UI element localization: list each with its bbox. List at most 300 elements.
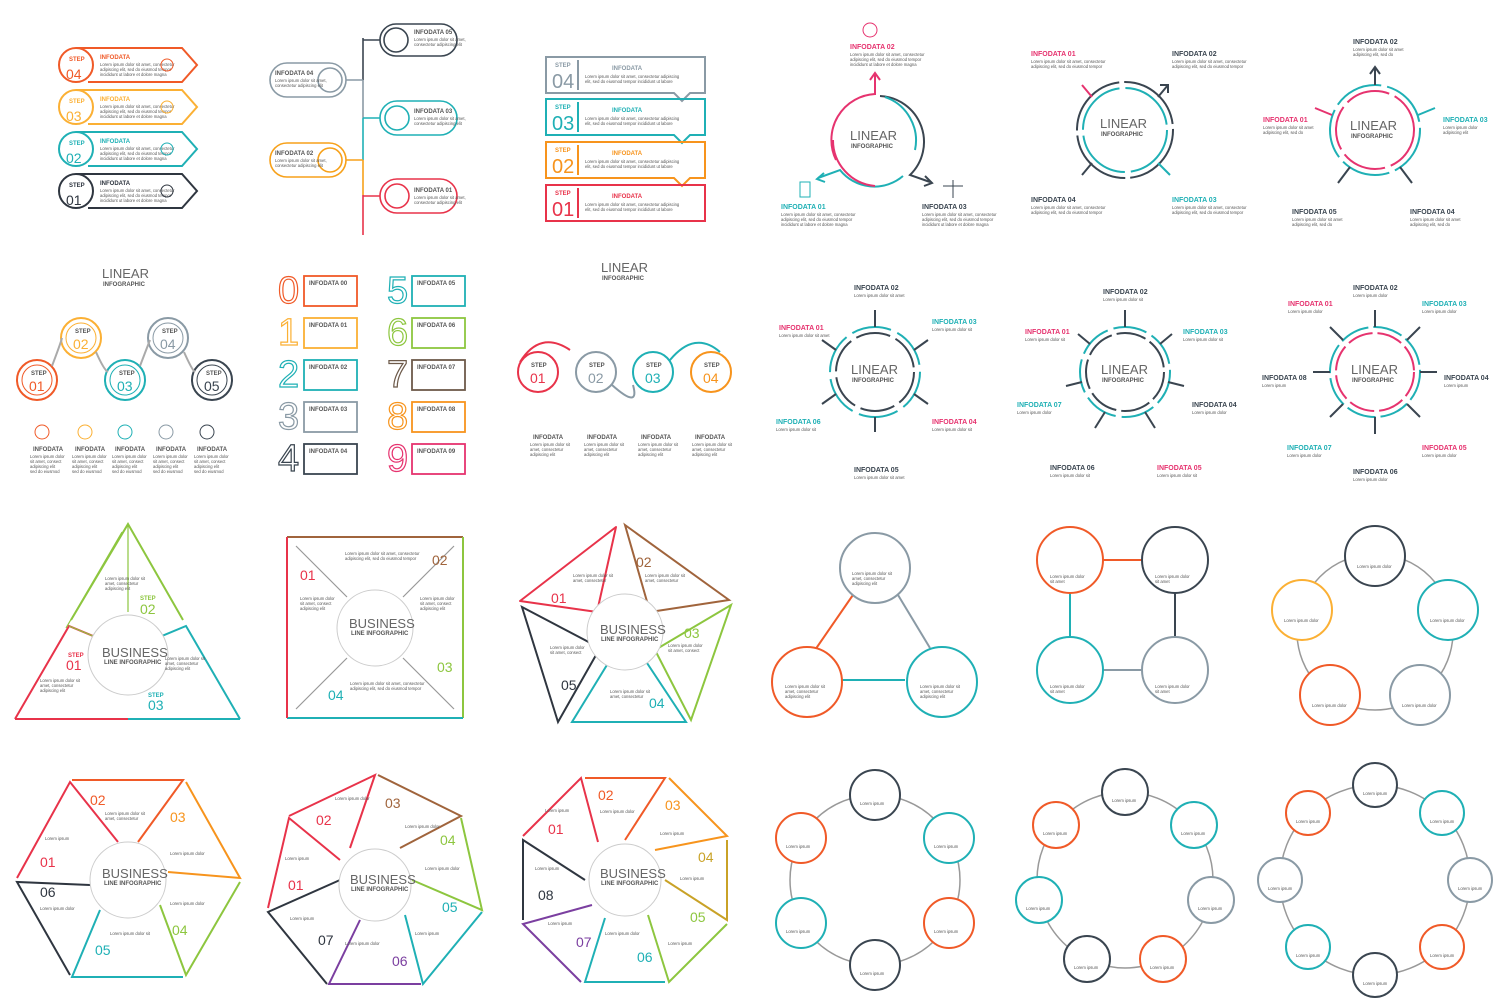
panel: 8 circle cycle: Lorem ipsum (1296, 953, 1321, 958)
labels: adipiscing elit, sed do (1263, 130, 1304, 135)
panel: numbers 0-9: 5 (387, 270, 408, 312)
label infodata 03: adipiscing elit, sed do eiusmod tempor (922, 217, 994, 222)
panel: 8 circle cycle: Lorem ipsum (1268, 886, 1293, 891)
panel: circle 6 arrows: LINEAR (851, 362, 898, 377)
labels: INFODATA 04 (1031, 197, 1076, 204)
panel: 4 step circles (518, 260, 733, 457)
panel: numbers 0-9: 3 (278, 396, 299, 438)
circles: 03 (117, 378, 133, 394)
labels: Lorem ipsum dolor sit amet (1263, 125, 1314, 130)
panel: square: adipiscing elit, sed do eiusmod tempor (345, 556, 417, 561)
infodata 05 (363, 24, 466, 56)
step 02: incididunt ut labore et dolore magna (100, 156, 167, 161)
panel: 4 step circles: adipiscing elit (638, 452, 664, 457)
panel: circular 3 arrows: LINEAR (850, 128, 897, 143)
panel: heptagon: Lorem ipsum (415, 931, 440, 936)
panel: triangle: 03 (148, 697, 164, 713)
panel: pentagon: Lorem ipsum dolor sit (645, 573, 686, 578)
info columns: sit amet, consect (30, 459, 62, 464)
panel: circle 6 arrows: Lorem ipsum dolor sit amet (779, 333, 830, 338)
panel: 8 circle cycle: Lorem ipsum (1430, 953, 1455, 958)
panel: circle 7 arrows: Lorem ipsum dolor (1017, 410, 1052, 415)
panel: pentagon: sit amet, consect (668, 648, 700, 653)
panel: 4 step circles: Lorem ipsum dolor sit (638, 442, 679, 447)
step 03: 03 (66, 108, 82, 124)
panel: circle 7 arrows: Lorem ipsum dolor sit (1025, 337, 1066, 342)
panel: circle 7 arrows: Lorem ipsum dolor sit (1157, 473, 1198, 478)
panel: 7 circle cycle: Lorem ipsum (1043, 831, 1068, 836)
panel: 7 circle cycle: Lorem ipsum (1112, 798, 1137, 803)
panel: 3 circle cycle: Lorem ipsum dolor sit (852, 571, 893, 576)
step 04: 04 (66, 66, 82, 82)
box step 02: elit, sed do eiusmod tempor incididunt ut labore (585, 164, 673, 169)
circles: STEP (162, 329, 178, 335)
panel: octagon: 02 (598, 787, 614, 803)
panel: circular 5 arrows: LINEAR (1350, 118, 1397, 133)
step 04: INFODATA (100, 55, 131, 61)
labels: INFODATA 03 (1443, 117, 1488, 124)
panel: hexagon: 04 (172, 922, 188, 938)
panel: chain circles: INFOGRAPHIC (103, 282, 146, 288)
panel: 4 step circles: adipiscing elit (530, 452, 556, 457)
step 01: Lorem ipsum dolor sit amet, consectetur (100, 188, 175, 193)
panel: 4 circle cycle: Lorem ipsum dolor (1155, 684, 1190, 689)
info columns: sed do eiusmod (153, 469, 183, 474)
step 02: 02 (66, 150, 82, 166)
panel: hexagon: 02 (90, 792, 106, 808)
panel: triangle: Lorem ipsum dolor sit (165, 656, 206, 661)
box step 02: Lorem ipsum dolor sit amet, consectetur adipiscing (585, 159, 680, 164)
circles: 04 (160, 336, 176, 352)
box step 03: INFODATA (612, 108, 643, 114)
panel: triangle: adipiscing elit (105, 586, 131, 591)
step 03: adipiscing elit, sed do eiusmod tempor (100, 109, 172, 114)
panel: hexagon: 01 (40, 854, 56, 870)
panel: hexagon: 06 (40, 884, 56, 900)
panel: numbers 0-9: INFODATA 00 (309, 281, 348, 287)
circles: 05 (204, 378, 220, 394)
infodata 01: INFODATA 01 (414, 188, 453, 194)
labels: Lorem ipsum dolor sit amet (1410, 217, 1461, 222)
panel: pentagon: 02 (636, 554, 652, 570)
panel: circle 8 arrows: Lorem ipsum dolor (1422, 453, 1457, 458)
panel: 4 step circles: INFODATA (641, 435, 672, 441)
panel: triangle: adipiscing elit (165, 666, 191, 671)
label infodata 03: incididunt ut labore et dolore magna (922, 222, 989, 227)
panel: heptagon: 05 (442, 899, 458, 915)
infodata 02 (270, 143, 363, 177)
panel: square: BUSINESS (349, 616, 415, 631)
labels: Lorem ipsum dolor sit amet, consectetur (1031, 59, 1106, 64)
labels: INFODATA 02 (1172, 51, 1217, 58)
panel: hexagon: 05 (95, 942, 111, 958)
panel: octagon: BUSINESS (600, 866, 666, 881)
step 01: INFODATA (100, 181, 131, 187)
infodata 02: Lorem ipsum dolor sit amet, (275, 158, 327, 163)
panel: 5 circle cycle: Lorem ipsum dolor (1357, 564, 1392, 569)
panel: pentagon: amet, consectetur (573, 578, 607, 583)
step 01: adipiscing elit, sed do eiusmod tempor (100, 193, 172, 198)
label infodata 01 (781, 182, 856, 227)
step 03: STEP (69, 99, 85, 105)
label infodata 03 (922, 180, 997, 227)
panel: circle 8 arrows: Lorem ipsum (1444, 383, 1469, 388)
circles: STEP (119, 371, 135, 377)
panel: heptagon: Lorem ipsum (290, 916, 315, 921)
infodata 05: INFODATA 05 (414, 30, 453, 36)
panel: triangle: Lorem ipsum dolor sit (105, 576, 146, 581)
panel: 8 circle cycle: Lorem ipsum (1296, 819, 1321, 824)
panel: circle 8 arrows: Lorem ipsum dolor (1287, 453, 1322, 458)
labels: adipiscing elit, sed do eiusmod tempor (1172, 210, 1244, 215)
label infodata 02 (850, 23, 925, 67)
panel: 6 circle cycle (776, 770, 974, 990)
panel: triangle (15, 524, 240, 719)
label infodata 02: adipiscing elit, sed do eiusmod tempor (850, 57, 922, 62)
panel: pentagon: 03 (684, 625, 700, 641)
panel: 7 circle cycle: Lorem ipsum (1026, 906, 1051, 911)
panel: pentagon: Lorem ipsum dolor sit (610, 689, 651, 694)
labels: INFODATA 01 (1263, 117, 1308, 124)
box step 03: 03 (552, 113, 574, 135)
panel: circle 6 arrows: Lorem ipsum dolor sit (932, 427, 973, 432)
panel: 7 circle cycle: Lorem ipsum (1150, 965, 1175, 970)
panel: numbers 0-9: 7 (387, 354, 408, 396)
infodata 02: consectetur adipiscing elit (275, 163, 324, 168)
box step 01: Lorem ipsum dolor sit amet, consectetur adipiscing (585, 202, 680, 207)
panel: 4 step circles: INFODATA (533, 435, 564, 441)
panel: circle 7 arrows: INFODATA 02 (1103, 289, 1148, 296)
circles: STEP (206, 371, 222, 377)
labels: INFODATA 03 (1172, 197, 1217, 204)
panel: 4 circle cycle: sit amet (1155, 689, 1170, 694)
panel: 5 circle cycle: Lorem ipsum dolor (1312, 703, 1347, 708)
panel: circle 8 arrows: INFODATA 06 (1353, 469, 1398, 476)
panel: 4 step circles: 04 (703, 370, 719, 386)
labels (1263, 39, 1488, 227)
panel: pentagon: 01 (551, 590, 567, 606)
panel: 5 circle cycle: Lorem ipsum dolor (1402, 703, 1437, 708)
infodata 03: INFODATA 03 (414, 109, 453, 115)
info columns (30, 425, 229, 474)
panel: 4 step circles: STEP (704, 363, 720, 369)
label infodata 02: incididunt ut labore et dolore magna (850, 62, 917, 67)
box step 04 (546, 57, 705, 101)
step 02 (59, 132, 197, 166)
panel: octagon: Lorem ipsum (545, 808, 570, 813)
panel: numbers 0-9: INFODATA 01 (309, 323, 348, 329)
panel: pentagon: LINE INFOGRAPHIC (601, 637, 659, 643)
panel: circle 8 arrows: Lorem ipsum dolor (1353, 477, 1388, 482)
panel: pentagon: Lorem ipsum dolor sit (573, 573, 614, 578)
panel: triangle: amet, consectetur (40, 683, 74, 688)
labels: INFODATA 04 (1410, 209, 1455, 216)
panel: circle 7 arrows: INFODATA 04 (1192, 402, 1237, 409)
panel: square: Lorem ipsum dolor sit amet, consectetur (345, 551, 420, 556)
panel: 4 step circles: Lorem ipsum dolor sit (692, 442, 733, 447)
panel: circle 6 arrows: Lorem ipsum dolor sit (776, 427, 817, 432)
panel: circle 7 arrows (1017, 289, 1237, 478)
panel: heptagon: Lorem ipsum dolor (425, 866, 460, 871)
panel: square: 02 (432, 552, 448, 568)
panel: circle 7 arrows: INFODATA 05 (1157, 465, 1202, 472)
panel: triangle: LINE INFOGRAPHIC (104, 660, 162, 666)
circles: STEP (31, 371, 47, 377)
panel: circle 6 arrows: INFODATA 04 (932, 419, 977, 426)
panel: pentagon: sit amet, consect (550, 650, 582, 655)
label infodata 03: INFODATA 03 (922, 204, 967, 211)
panel: circle 8 arrows: Lorem ipsum dolor (1353, 293, 1388, 298)
panel: numbers 0-9: INFODATA 08 (417, 407, 456, 413)
panel: 4 step circles: amet, consectetur (584, 447, 618, 452)
panel: octagon: Lorem ipsum (548, 921, 573, 926)
panel: square: adipiscing elit, sed do eiusmod tempor (350, 686, 422, 691)
panel: 8 circle cycle: Lorem ipsum (1363, 981, 1388, 986)
panel: 8 circle cycle: Lorem ipsum (1458, 886, 1483, 891)
panel: 8 circle cycle: Lorem ipsum (1430, 819, 1455, 824)
panel: octagon (523, 778, 727, 982)
info columns: Lorem ipsum dolor (72, 454, 107, 459)
panel: numbers 0-9: INFODATA 04 (309, 449, 348, 455)
info columns: INFODATA (75, 447, 106, 453)
step 01: incididunt ut labore et dolore magna (100, 198, 167, 203)
panel: circle 8 arrows: Lorem ipsum dolor (1422, 309, 1457, 314)
label infodata 01: adipiscing elit, sed do eiusmod tempor (781, 217, 853, 222)
panel: triangle: 02 (140, 601, 156, 617)
panel: circular 4 arrows (1031, 51, 1247, 215)
labels: Lorem ipsum dolor sit amet (1292, 217, 1343, 222)
panel: circle 7 arrows: INFODATA 03 (1183, 329, 1228, 336)
panel: numbers 0-9: 6 (387, 312, 408, 354)
infodata 02: INFODATA 02 (275, 151, 314, 157)
panel: square: LINE INFOGRAPHIC (351, 631, 409, 637)
labels: adipiscing elit, sed do (1292, 222, 1333, 227)
circles: 01 (29, 378, 45, 394)
step 02: INFODATA (100, 139, 131, 145)
panel: 3 circle cycle: Lorem ipsum dolor sit (785, 684, 826, 689)
label infodata 02: INFODATA 02 (850, 44, 895, 51)
panel: 4 step circles: amet, consectetur (530, 447, 564, 452)
step 03: incididunt ut labore et dolore magna (100, 114, 167, 119)
step 02: STEP (69, 141, 85, 147)
panel: pentagon (520, 525, 731, 722)
labels: Lorem ipsum dolor sit amet (1353, 47, 1404, 52)
panel: octagon: LINE INFOGRAPHIC (601, 881, 659, 887)
panel: circle 8 arrows: INFOGRAPHIC (1352, 378, 1395, 384)
box step 04: Lorem ipsum dolor sit amet, consectetur adipiscing (585, 74, 680, 79)
panel: 3 circle cycle (772, 533, 977, 717)
panel: 4 step circles: INFODATA (695, 435, 726, 441)
panel: 4 circle cycle: Lorem ipsum dolor (1050, 684, 1085, 689)
panel: circle 8 arrows: LINEAR (1351, 362, 1398, 377)
panel: hexagon (17, 780, 240, 977)
panel: 4 step circles: Lorem ipsum dolor sit (530, 442, 571, 447)
panel: square (287, 537, 463, 718)
panel: triangle: adipiscing elit (40, 688, 66, 693)
panel: 3 circle cycle: amet, consectetur (852, 576, 886, 581)
panel: octagon: Lorem ipsum (680, 876, 705, 881)
infodata 03 (363, 101, 466, 135)
panel: numbers 0-9: INFODATA 06 (417, 323, 456, 329)
panel: circle 6 arrows: Lorem ipsum dolor sit amet (854, 293, 905, 298)
panel: circle 6 arrows: INFODATA 05 (854, 467, 899, 474)
panel: 4 circle cycle: Lorem ipsum dolor (1155, 574, 1190, 579)
infodata 05: Lorem ipsum dolor sit amet, (414, 37, 466, 42)
panel: square: adipiscing elit (420, 606, 446, 611)
panel: pentagon: 04 (649, 695, 665, 711)
circles: 02 (73, 336, 89, 352)
info columns: adipiscing elit (30, 464, 56, 469)
panel: heptagon: BUSINESS (350, 872, 416, 887)
panel: octagon: 08 (538, 887, 554, 903)
panel: circular 4 arrows: INFOGRAPHIC (1101, 132, 1144, 138)
panel: circular 5 arrows (1263, 39, 1488, 227)
panel: hexagon: Lorem ipsum dolor (170, 851, 205, 856)
infodata 04: consectetur adipiscing elit (275, 83, 324, 88)
step 04: incididunt ut labore et dolore magna (100, 72, 167, 77)
step 04: Lorem ipsum dolor sit amet, consectetur (100, 62, 175, 67)
panel: pentagon: amet, consectetur (645, 578, 679, 583)
labels: adipiscing elit, sed do eiusmod tempor (1172, 64, 1244, 69)
panel: circle 7 arrows: Lorem ipsum dolor sit (1183, 337, 1224, 342)
panel: 3 circle cycle: amet, consectetur (785, 689, 819, 694)
label infodata 02: Lorem ipsum dolor sit amet, consectetur (850, 52, 925, 57)
panel: step boxes (546, 57, 705, 221)
panel: pentagon: Lorem ipsum dolor (550, 645, 585, 650)
infodata 03: Lorem ipsum dolor sit amet, (414, 116, 466, 121)
panel: heptagon (268, 775, 482, 984)
panel: hexagon: Lorem ipsum (45, 836, 70, 841)
panel: octagon: Lorem ipsum dolor (605, 931, 640, 936)
panel: octagon: 04 (698, 849, 714, 865)
panel: triangle: Lorem ipsum dolor sit (40, 678, 81, 683)
panel: triangle: STEP (140, 596, 156, 602)
label infodata 01: Lorem ipsum dolor sit amet, consectetur (781, 212, 856, 217)
step 03: INFODATA (100, 97, 131, 103)
panel: circular 3 arrows (781, 23, 997, 227)
panel: numbers 0-9: 2 (278, 354, 299, 396)
panel: numbers 0-9: 8 (387, 396, 408, 438)
panel: 3 circle cycle: adipiscing elit (785, 694, 811, 699)
box step 02: INFODATA (612, 151, 643, 157)
panel: circle 8 arrows (1262, 285, 1489, 482)
box step 01: elit, sed do eiusmod tempor incididunt ut labore (585, 207, 673, 212)
info columns: Lorem ipsum dolor (112, 454, 147, 459)
infodata 01: consectetur adipiscing elit (414, 200, 463, 205)
labels: adipiscing elit, sed do (1353, 52, 1394, 57)
info columns: INFODATA (197, 447, 228, 453)
panel: numbers 0-9: INFODATA 07 (417, 365, 456, 371)
panel: 4 step circles: amet, consectetur (638, 447, 672, 452)
panel: circle 6 arrows: INFOGRAPHIC (852, 378, 895, 384)
panel: hexagon: Lorem ipsum dolor sit (110, 931, 151, 936)
panel: square: 03 (437, 659, 453, 675)
labels: adipiscing elit, sed do eiusmod tempor (1031, 210, 1103, 215)
label infodata 01: incididunt ut labore et dolore magna (781, 222, 848, 227)
panel: 4 circle cycle: sit amet (1155, 579, 1170, 584)
panel: pentagon: Lorem ipsum dolor (668, 643, 703, 648)
panel: circle 8 arrows: INFODATA 07 (1287, 445, 1332, 452)
panel: triangle: STEP (68, 653, 84, 659)
info columns: Lorem ipsum dolor (194, 454, 229, 459)
panel: 4 circle cycle: sit amet (1050, 689, 1065, 694)
panel: circle 6 arrows: INFODATA 06 (776, 419, 821, 426)
panel: circle 8 arrows: Lorem ipsum (1262, 383, 1287, 388)
panel: octagon: Lorem ipsum dolor (600, 809, 635, 814)
panel: 4 step circles: 01 (530, 370, 546, 386)
panel: circle 7 arrows: INFOGRAPHIC (1102, 378, 1145, 384)
panel: 4 step circles: adipiscing elit (692, 452, 718, 457)
panel: heptagon: LINE INFOGRAPHIC (351, 887, 409, 893)
panel: 3 circle cycle: amet, consectetur (920, 689, 954, 694)
panel: 5 circle cycle: Lorem ipsum dolor (1284, 618, 1319, 623)
step 02: adipiscing elit, sed do eiusmod tempor (100, 151, 172, 156)
panel: numbers 0-9: 0 (278, 270, 299, 312)
panel: 4 step circles: INFOGRAPHIC (602, 276, 645, 282)
panel: circle 7 arrows: LINEAR (1101, 362, 1148, 377)
info columns: Lorem ipsum dolor (30, 454, 65, 459)
panel: vertical timeline (270, 24, 466, 235)
info columns: Lorem ipsum dolor (153, 454, 188, 459)
panel: square: sit amet, consect (300, 601, 332, 606)
panel: heptagon: Lorem ipsum dolor (405, 824, 440, 829)
panel: heptagon: Lorem ipsum (285, 856, 310, 861)
panel: 7 circle cycle: Lorem ipsum (1074, 965, 1099, 970)
panel: pentagon: BUSINESS (600, 622, 666, 637)
panel: octagon: 01 (548, 821, 564, 837)
panel: octagon: 07 (576, 934, 592, 950)
labels: INFODATA 05 (1292, 209, 1337, 216)
panel: 6 circle cycle: Lorem ipsum (860, 971, 885, 976)
panel: hexagon: Lorem ipsum dolor sit (105, 811, 146, 816)
panel: 8 circle cycle (1258, 763, 1492, 997)
labels: INFODATA 01 (1031, 51, 1076, 58)
panel: triangle: STEP (148, 693, 164, 699)
panel: 8 circle cycle: Lorem ipsum (1363, 791, 1388, 796)
step 03 (59, 90, 197, 124)
panel: circle 6 arrows: Lorem ipsum dolor sit amet (854, 475, 905, 480)
info columns: sit amet, consect (72, 459, 104, 464)
panel: circle 8 arrows: INFODATA 05 (1422, 445, 1467, 452)
panel: 3 circle cycle: adipiscing elit (920, 694, 946, 699)
panel: circle 8 arrows: Lorem ipsum dolor (1288, 309, 1323, 314)
panel: circle 7 arrows: Lorem ipsum dolor sit (1103, 297, 1144, 302)
box step 01: STEP (555, 191, 571, 197)
infodata 04: Lorem ipsum dolor sit amet, (275, 78, 327, 83)
panel: square: 04 (328, 687, 344, 703)
panel: heptagon: 01 (288, 877, 304, 893)
panel: numbers 0-9: 4 (278, 438, 299, 480)
panel: 4 step circles: Lorem ipsum dolor sit (584, 442, 625, 447)
panel: circle 7 arrows: INFODATA 07 (1017, 402, 1062, 409)
panel: octagon: 06 (637, 949, 653, 965)
panel: 6 circle cycle: Lorem ipsum (860, 801, 885, 806)
box step 01: INFODATA (612, 194, 643, 200)
panel: square: adipiscing elit (300, 606, 326, 611)
labels: Lorem ipsum dolor sit amet, consectetur (1172, 205, 1247, 210)
panel: 4 step circles: adipiscing elit (584, 452, 610, 457)
step 01 (59, 174, 197, 208)
labels: adipiscing elit (1443, 130, 1469, 135)
panel: 4 step circles: 02 (588, 370, 604, 386)
panel: 4 circle cycle: sit amet (1050, 579, 1065, 584)
panel: 6 circle cycle: Lorem ipsum (786, 844, 811, 849)
box step 03: Lorem ipsum dolor sit amet, consectetur adipiscing (585, 116, 680, 121)
panel: square: Lorem ipsum dolor (420, 596, 455, 601)
panel: numbers 0-9: INFODATA 02 (309, 365, 348, 371)
box step 03: STEP (555, 105, 571, 111)
panel: circular 3 arrows: INFOGRAPHIC (851, 144, 894, 150)
